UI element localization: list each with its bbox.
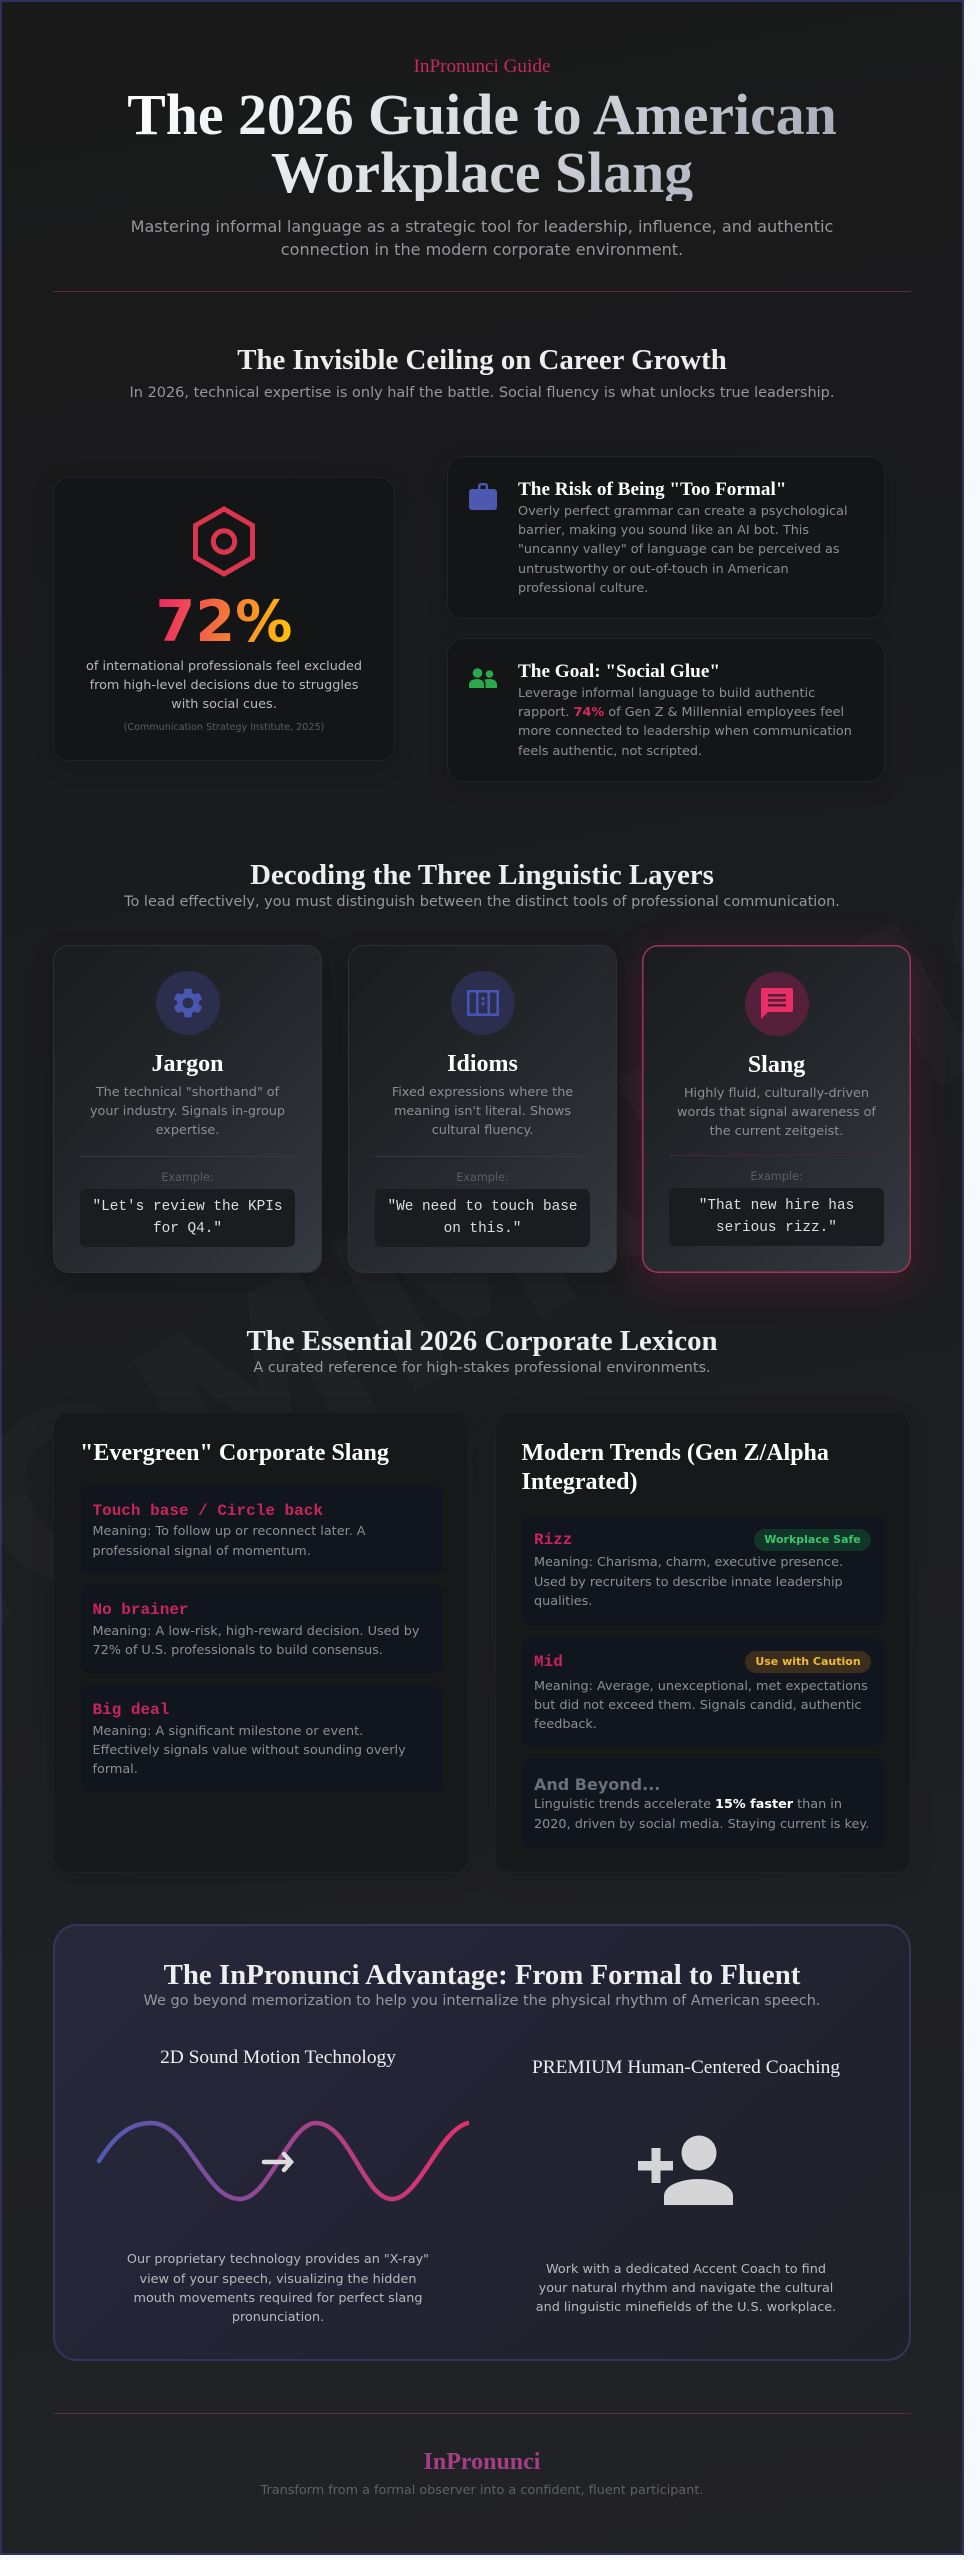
layer description: Fixed expressions where the — [392, 1085, 573, 1100]
layer description: expertise. — [156, 1123, 219, 1138]
badge: use with caution — [745, 1651, 871, 1673]
card text: Overly perfect grammar can create a psychological — [518, 504, 848, 519]
panel heading: "Evergreen" Corporate Slang — [80, 1440, 389, 1466]
term: no brainer: Meaning: A low-risk, high-reward decision. Used by — [92, 1624, 419, 1639]
technology description: view of your speech, visualizing the hidden — [140, 2272, 416, 2287]
title: Workplace Slang — [271, 140, 693, 205]
layer name: Slang — [748, 1052, 805, 1078]
card text: Leverage informal language to build authentic — [518, 686, 815, 701]
layer description: The technical "shorthand" of — [96, 1085, 279, 1100]
heading: invisible ceiling: The Invisible Ceiling on Career Growth — [237, 344, 727, 376]
term: mid: feedback. — [534, 1717, 597, 1732]
icon: arrow — [264, 2154, 291, 2170]
layer description: words that signal awareness of — [677, 1105, 876, 1120]
term: and beyond: Linguistic trends accelerate 15% faster than in — [534, 1797, 842, 1812]
icon: open book columns — [450, 971, 514, 1035]
term: no brainer: No brainer — [92, 1601, 189, 1619]
term: mid — [522, 1638, 884, 1746]
layer description: Highly fluid, culturally-driven — [684, 1086, 869, 1101]
panel: evergreen corporate slang — [53, 1412, 469, 1873]
footer tagline: Transform from a formal observer into a confident, fluent participant. — [261, 2483, 703, 2498]
icon: briefcase — [469, 483, 497, 510]
statistic: 72%: 72% — [156, 589, 292, 655]
panel heading: The InPronunci Advantage: From Formal to Fluent — [164, 1959, 800, 1991]
term: touch base: professional signal of momentum. — [92, 1544, 311, 1559]
layer description: meaning isn't literal. Shows — [394, 1104, 571, 1119]
icon: hexagon target — [193, 506, 255, 577]
coaching description — [536, 2262, 836, 2315]
panel heading: Integrated) — [522, 1469, 637, 1495]
term: and beyond: 2020, driven by social media. Staying current is key. — [534, 1817, 869, 1832]
badge: workplace safe: Workplace Safe — [764, 1532, 861, 1546]
example quote — [669, 1188, 884, 1246]
subtitle: Mastering informal language as a strategic tool for leadership, influence, and authentic — [131, 216, 833, 236]
technology description: Our proprietary technology provides an "X-ray" — [127, 2252, 429, 2267]
term: big deal: Big deal — [92, 1701, 169, 1719]
badge: use with caution: Use with Caution — [755, 1655, 861, 1668]
example quote — [375, 1189, 590, 1247]
card text: rapport. 74% of Gen Z & Millennial employees feel — [518, 705, 844, 720]
term: mid: but did not exceed them. Signals candid, authentic — [534, 1698, 861, 1713]
layer description: the current zeitgeist. — [710, 1124, 843, 1139]
panel intro: We go beyond memorization to help you internalize the physical rhythm of American speech. — [143, 1993, 821, 2009]
card text: "uncanny valley" of language can be perceived as — [518, 542, 840, 557]
term: rizz: Rizz — [534, 1531, 572, 1549]
title: The 2026 Guide to American — [127, 82, 837, 147]
example quote: serious rizz." — [716, 1220, 837, 1236]
term: big deal: formal. — [92, 1762, 138, 1777]
layer description: your industry. Signals in-group — [90, 1104, 285, 1119]
heading: three linguistic layers: Decoding the Three Linguistic Layers — [250, 859, 714, 891]
term: no brainer — [80, 1585, 442, 1673]
layer name: Idioms — [447, 1051, 518, 1077]
panel: social glue goal — [447, 638, 885, 782]
example label: Example: — [750, 1170, 803, 1183]
term: touch base: Touch base / Circle back — [92, 1502, 323, 1520]
coaching description: your natural rhythm and navigate the cultural — [539, 2281, 833, 2296]
statistic description: of international professionals feel excluded — [86, 659, 362, 674]
layer description — [90, 1085, 285, 1138]
term: rizz: qualities. — [534, 1594, 592, 1609]
eyebrow: brand guide: InPronunci Guide — [414, 56, 550, 77]
panel: modern trends — [495, 1412, 911, 1873]
card text — [518, 504, 848, 596]
term: rizz: Used by recruiters to describe innate leadership — [534, 1575, 843, 1590]
footer brand: InPronunci — [424, 2449, 540, 2475]
example quote: "Let's review the KPIs — [92, 1199, 282, 1215]
panel: 72% statistic — [53, 477, 395, 761]
panel: risk of being too formal — [447, 456, 885, 619]
icon: chat bubble — [744, 972, 808, 1036]
subtitle: connection in the modern corporate environment. — [281, 240, 683, 258]
coaching description: Work with a dedicated Accent Coach to find — [546, 2262, 826, 2277]
panel: InPronunci advantage — [53, 1924, 911, 2361]
heading: corporate lexicon: The Essential 2026 Corporate Lexicon — [246, 1325, 718, 1357]
layer name: Jargon — [152, 1051, 224, 1077]
heading: human coaching: PREMIUM Human-Centered Coaching — [532, 2057, 840, 2078]
term: rizz: Meaning: Charisma, charm, executive presence. — [534, 1555, 843, 1570]
term: touch base — [80, 1486, 442, 1574]
section intro: corporate lexicon: A curated reference for high-stakes professional environments. — [253, 1360, 711, 1376]
statistic description: with social cues. — [171, 697, 277, 712]
term: mid: Mid — [534, 1652, 563, 1670]
layer description — [392, 1085, 573, 1138]
technology description: pronunciation. — [232, 2310, 324, 2325]
badge: workplace safe — [754, 1528, 871, 1550]
card text: untrustworthy or out-of-touch in American — [518, 562, 789, 577]
example quote: "That new hire has — [699, 1198, 854, 1214]
statistic description — [86, 659, 362, 712]
example quote — [80, 1189, 295, 1247]
term: big deal: Meaning: A significant milestone or event. — [92, 1724, 363, 1739]
heading: sound motion technology: 2D Sound Motion Technology — [160, 2047, 396, 2068]
icon: group of people — [469, 668, 497, 688]
panel: slang highlighted — [642, 945, 911, 1273]
section intro: invisible ceiling: In 2026, technical expertise is only half the battle. Social fluency is what unlocks true leadership. — [130, 385, 834, 401]
example quote: for Q4." — [153, 1221, 222, 1237]
card text: feels authentic, not scripted. — [518, 744, 702, 759]
technology description — [127, 2252, 429, 2325]
chart: sound wave with arrow — [96, 2120, 469, 2202]
section intro: linguistic layers: To lead effectively, you must distinguish between the distinct tools of professional communication. — [124, 894, 840, 910]
term: and beyond: And Beyond... — [534, 1775, 660, 1794]
term: touch base: Meaning: To follow up or reconnect later. A — [92, 1524, 366, 1539]
card text — [518, 686, 852, 759]
term: and beyond — [522, 1759, 884, 1847]
term: mid: Meaning: Average, unexceptional, met expectations — [534, 1678, 868, 1694]
panel: idioms — [348, 945, 617, 1273]
example quote: on this." — [444, 1221, 521, 1237]
technology description: mouth movements required for perfect slang — [134, 2291, 422, 2306]
card text: more connected to leadership when communication — [518, 724, 852, 739]
subtitle — [131, 216, 833, 258]
coaching description: and linguistic minefields of the U.S. workplace. — [536, 2300, 836, 2315]
card text: professional culture. — [518, 581, 648, 596]
statistic description: from high-level decisions due to struggles — [90, 678, 358, 693]
icon: add person — [638, 2136, 733, 2205]
icon: gear — [156, 971, 220, 1035]
card text: barrier, making you sound like an AI bot. This — [518, 523, 809, 538]
panel: jargon — [53, 945, 322, 1273]
term: big deal: Effectively signals value without sounding overly — [92, 1743, 406, 1758]
panel heading: Modern Trends (Gen Z/Alpha — [522, 1440, 829, 1466]
term: rizz — [522, 1516, 884, 1625]
source note: (Communication Strategy Institute, 2025) — [124, 722, 324, 733]
example label: Example: — [161, 1171, 214, 1184]
title — [124, 86, 840, 201]
layer description — [677, 1086, 876, 1139]
card heading: The Risk of Being "Too Formal" — [518, 479, 786, 500]
card heading: The Goal: "Social Glue" — [518, 661, 720, 682]
example label: Example: — [456, 1171, 509, 1184]
example quote: "We need to touch base — [388, 1199, 578, 1215]
panel heading — [522, 1440, 829, 1495]
layer description: cultural fluency. — [432, 1123, 533, 1138]
term: no brainer: 72% of U.S. professionals to build consensus. — [92, 1643, 383, 1658]
term: big deal — [80, 1686, 442, 1792]
